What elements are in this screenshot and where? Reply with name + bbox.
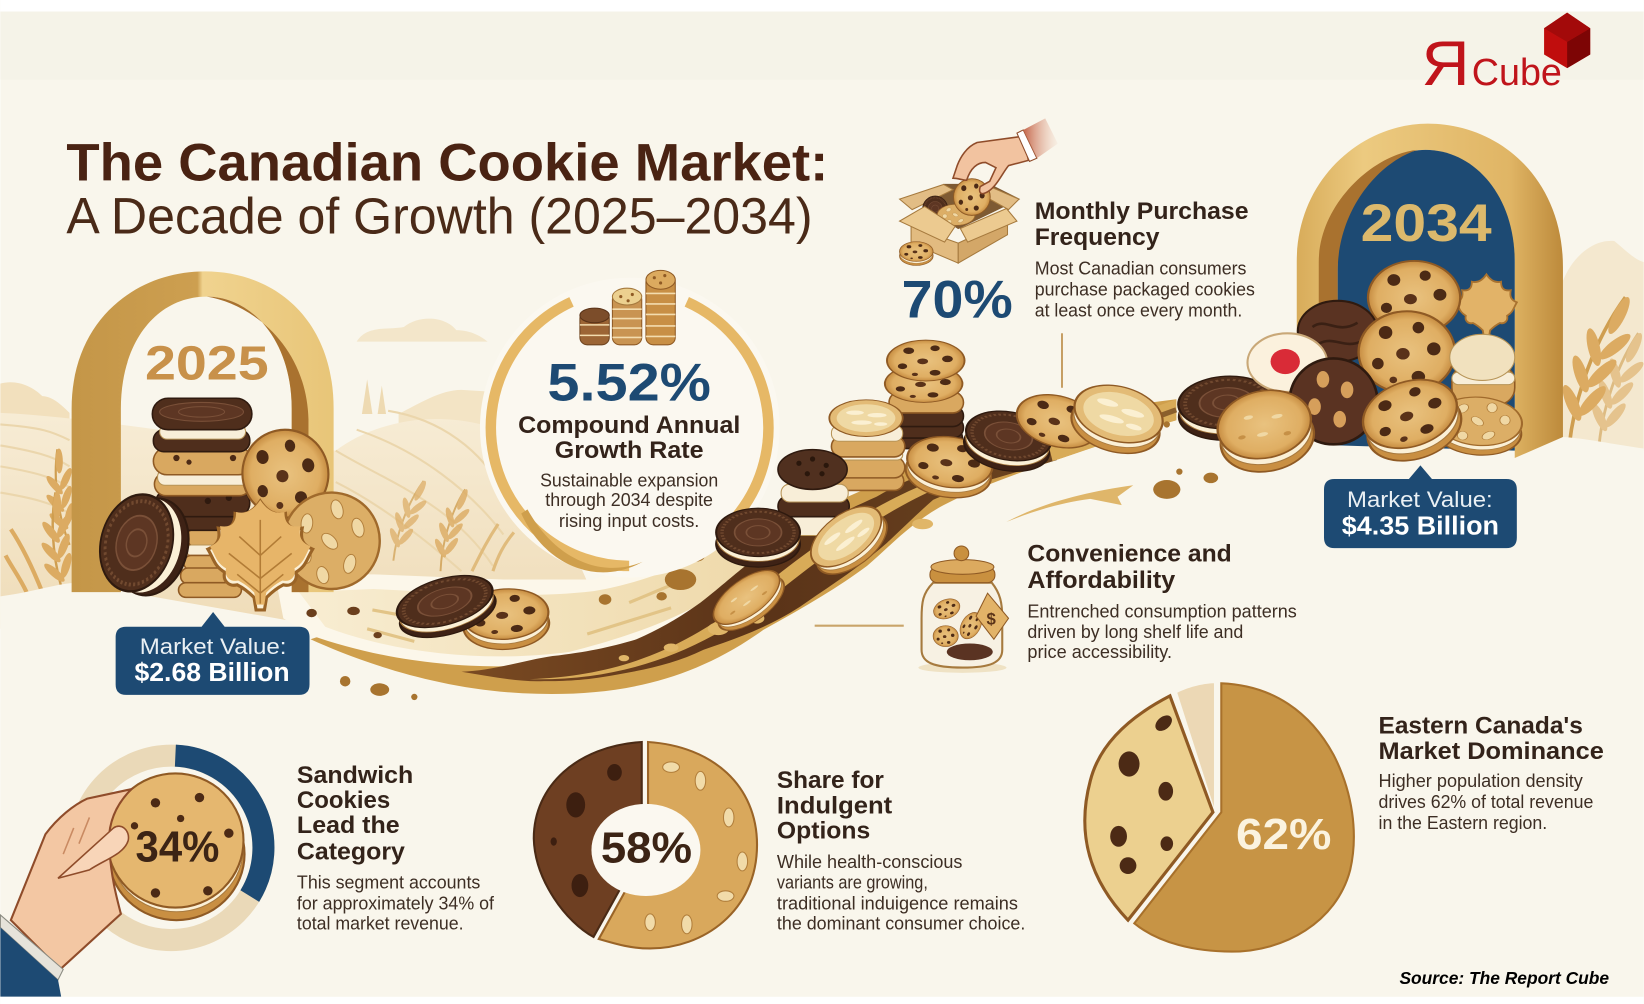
heading: share for indulgent options: Options — [777, 817, 870, 844]
growth swoosh ribbon — [275, 399, 1218, 700]
cookie pile 2034 — [1177, 261, 1524, 480]
hand and sleeve — [0, 789, 131, 997]
gold stripe in stream — [530, 477, 949, 679]
sandwich stack — [152, 398, 252, 597]
foreground ground — [0, 437, 1644, 997]
crumbs — [306, 421, 1218, 700]
chart: 58% cookie donut — [534, 742, 757, 948]
text: convenience description — [1027, 600, 1297, 662]
light wedge — [1177, 683, 1214, 807]
source note: Source: The Report Cube — [1399, 968, 1609, 988]
CAGR description: through 2034 despite — [545, 489, 713, 510]
callout: 2025 market value: Market Value: — [140, 634, 286, 659]
CAGR heading: Compound Annual — [518, 412, 740, 439]
text: indulgent description — [777, 851, 1025, 934]
cookies along the swoosh — [391, 340, 1169, 652]
CAGR value: 5.52% — [547, 354, 711, 412]
arch: 2025 — [72, 271, 334, 592]
leader line: monthly purchase — [1061, 333, 1063, 388]
text: indulgent description: the dominant consumer choice. — [777, 913, 1025, 934]
heading: sandwich cookies: Lead the — [297, 812, 400, 839]
panel: CAGR circle — [480, 270, 780, 577]
heading: share for indulgent options: Share for — [777, 767, 884, 794]
logo: Cube — [1472, 51, 1562, 93]
62% wedge — [1134, 683, 1354, 952]
year label 2025: 2025 — [145, 336, 269, 390]
title — [66, 134, 828, 245]
text: convenience description: driven by long shelf life and — [1027, 621, 1243, 642]
callout: 2034 market value — [1324, 465, 1517, 548]
gold band — [311, 399, 1176, 694]
logo — [1421, 13, 1590, 99]
text: eastern description: drives 62% of total revenue — [1378, 791, 1593, 812]
heading: eastern canada — [1378, 713, 1604, 765]
heading: monthly purchase frequency: Monthly Purchase — [1035, 198, 1249, 225]
text: convenience description: price accessibility. — [1027, 641, 1172, 662]
logo: Я — [1421, 29, 1470, 99]
chart: 34% ring with hand-held sandwich cookie — [0, 756, 263, 997]
callout: 2034 market value: $4.35 Billion — [1342, 510, 1499, 540]
heading: convenience and affordability: Affordability — [1027, 567, 1176, 594]
CAGR description: rising input costs. — [559, 510, 699, 531]
text: sandwich description: total market revenue. — [297, 913, 464, 934]
icon: stacked cookie coins — [580, 270, 675, 345]
heading: share for indulgent options: Indulgent — [777, 792, 892, 819]
heading: eastern canada: Market Dominance — [1378, 738, 1604, 765]
heading: share for indulgent options — [777, 767, 892, 844]
white edge — [275, 514, 797, 666]
standing oreo — [89, 486, 199, 604]
heading: sandwich cookies: Sandwich — [297, 762, 413, 789]
callout: 2034 market value: Market Value: — [1347, 487, 1493, 512]
stat: 70%: 70% — [902, 272, 1013, 330]
text: indulgent description: While health-conscious — [777, 851, 962, 872]
text: eastern description: Higher population density — [1378, 770, 1584, 791]
callout: 2025 market value — [116, 612, 310, 695]
34% value: 34% — [136, 822, 219, 871]
year label 2034: 2034 — [1361, 195, 1492, 253]
heading: sandwich cookies — [297, 762, 413, 865]
text: monthly purchase description — [1035, 258, 1255, 321]
title: The Canadian Cookie Market: — [66, 134, 828, 192]
icon: cookie jar with price tag — [918, 546, 1009, 673]
dollar sign on tag: $ — [987, 610, 997, 629]
left landscape hills and wheat — [0, 319, 608, 629]
text: indulgent description: traditional induigence remains — [777, 893, 1018, 914]
stack: light sandwich — [829, 400, 905, 490]
CAGR description: Sustainable expansion — [540, 469, 718, 490]
heading: convenience and affordability — [1027, 541, 1232, 594]
right landscape hills and wheat — [1548, 241, 1644, 456]
brown stream — [461, 440, 1057, 681]
heading: monthly purchase frequency — [1035, 198, 1249, 251]
text: convenience description: Entrenched consumption patterns — [1027, 600, 1297, 621]
CAGR heading — [518, 412, 740, 464]
heading: sandwich cookies: Cookies — [297, 787, 390, 814]
dark cookie segment — [534, 742, 642, 937]
cookie wedge — [1085, 696, 1213, 920]
chart: 62% cookie pie — [1085, 683, 1354, 952]
title: A Decade of Growth (2025–2034) — [66, 188, 813, 245]
oat cookie segment — [599, 742, 757, 948]
text: monthly purchase description: Most Canadian consumers — [1035, 258, 1246, 279]
text: eastern description — [1378, 770, 1593, 833]
62% value: 62% — [1236, 810, 1331, 859]
CAGR heading: Growth Rate — [555, 437, 704, 464]
maple leaf cookie — [208, 500, 313, 610]
stack: tall dark and tan — [885, 340, 965, 449]
leader line: convenience — [815, 625, 904, 627]
text: sandwich description: for approximately 34% of — [297, 893, 495, 914]
gold upper right — [1048, 399, 1176, 461]
text: monthly purchase description: purchase packaged cookies — [1035, 279, 1255, 300]
callout: 2025 market value: $2.68 Billion — [135, 657, 290, 687]
heading: eastern canada: Eastern Canada's — [1378, 713, 1583, 740]
sandwich cookie — [107, 773, 245, 920]
flick arrow — [1006, 485, 1133, 522]
icon: hand picking cookie from box — [900, 118, 1058, 265]
text: monthly purchase description: at least once every month. — [1035, 300, 1242, 321]
donut hole — [591, 804, 700, 896]
heading: sandwich cookies: Category — [297, 838, 406, 865]
cookie pile 2025 — [89, 398, 391, 610]
heading: monthly purchase frequency: Frequency — [1035, 224, 1160, 251]
58% value: 58% — [601, 824, 692, 873]
text: sandwich description — [297, 872, 495, 934]
heading: convenience and affordability: Convenience and — [1027, 541, 1232, 568]
text: sandwich description: This segment accounts — [297, 872, 480, 893]
stack: chocolate sandwich — [778, 450, 849, 536]
cream stream — [299, 524, 786, 656]
text: indulgent description: variants are growing, — [777, 872, 928, 893]
CAGR description — [540, 469, 718, 531]
arch: 2034 — [1297, 124, 1563, 458]
text: eastern description: in the Eastern region. — [1378, 812, 1547, 833]
